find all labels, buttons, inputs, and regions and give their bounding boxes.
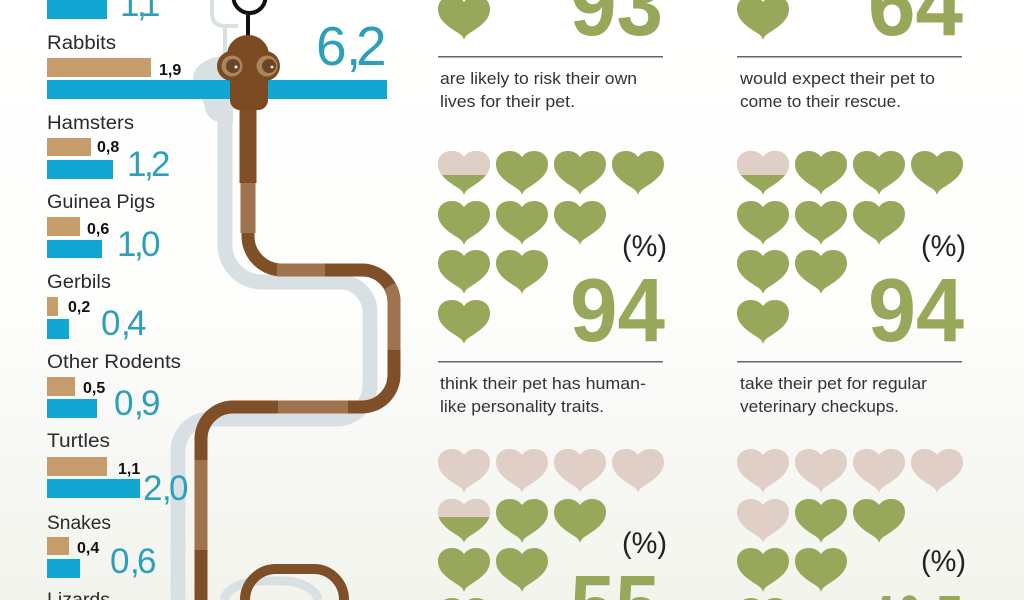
caption: come to their rescue.	[740, 92, 901, 111]
heart row	[737, 0, 789, 40]
panel: pet rescue stat	[737, 0, 963, 111]
bar row: guinea pigs: 0,6	[87, 221, 109, 238]
bar row: other rodents: 0,5	[83, 380, 105, 397]
caption: are likely to risk their own	[440, 69, 637, 88]
caption	[737, 361, 962, 416]
caption: lives for their pet.	[440, 92, 575, 111]
snake eye right	[256, 56, 278, 76]
caption: like personality traits.	[440, 397, 604, 416]
snake light segments	[201, 183, 394, 550]
bar row: rabbits: 1,9	[159, 62, 181, 79]
caption	[438, 56, 663, 111]
hearts grid	[438, 449, 664, 600]
bar row: guinea pigs: 1,0	[117, 225, 160, 264]
bar row: turtles: 2,0	[143, 469, 188, 508]
number 94: 94	[570, 261, 665, 361]
bar row: guinea pigs: Guinea Pigs	[47, 192, 155, 213]
bar row: gerbils: 0,4	[101, 304, 146, 343]
panel: third row left stat	[438, 449, 667, 600]
bar row: gerbils: 0,2	[68, 299, 90, 316]
bar row: other rodents	[47, 352, 181, 423]
bar row: other rodents: 0,9	[114, 384, 160, 423]
illustration: snake	[201, 0, 394, 600]
bar row: snakes: 0,6	[110, 542, 156, 581]
bar row: snakes: 0,4	[77, 540, 99, 557]
bar row: guinea pigs	[47, 192, 160, 264]
caption: think their pet has human-	[440, 374, 646, 393]
bar row: rabbits: Rabbits	[47, 33, 116, 54]
number 94: 94	[868, 261, 964, 361]
percent sign: (%)	[622, 230, 667, 263]
hearts grid	[737, 151, 963, 344]
percent sign: (%)	[921, 545, 966, 578]
bar row: turtles: Turtles	[47, 431, 110, 452]
hearts grid	[737, 449, 963, 600]
bar row: rabbits	[47, 15, 387, 99]
panel: personality stat	[438, 151, 667, 416]
caption: would expect their pet to	[739, 69, 935, 88]
snake shadow	[178, 0, 370, 600]
panel: veterinary stat	[737, 151, 966, 416]
bar row: gerbils	[47, 272, 146, 343]
bar row: hamsters: 1,2	[127, 145, 170, 184]
bar row: gerbils: Gerbils	[47, 272, 111, 293]
snake eye left	[222, 56, 242, 76]
bar row: other rodents: Other Rodents	[47, 352, 181, 373]
bar row: rabbits: 6,2	[316, 15, 387, 77]
bar row: hamsters	[47, 113, 170, 184]
panel: third row right stat	[737, 449, 966, 600]
snake body	[201, 100, 394, 600]
bar row: snakes: Snakes	[47, 513, 111, 534]
caption: veterinary checkups.	[740, 397, 899, 416]
panel: pets bar chart	[47, 0, 387, 600]
bar row: turtles: 1,1	[118, 461, 140, 478]
panel: risk lives stat	[438, 0, 663, 111]
snake head	[217, 35, 280, 110]
caption: take their pet for regular	[740, 374, 927, 393]
bar row: hamsters: 0,8	[97, 139, 119, 156]
bar row: snakes	[47, 513, 156, 581]
caption	[438, 361, 663, 416]
hearts grid	[438, 151, 664, 344]
bar row: turtles	[47, 431, 188, 508]
bar row: top cut-off pet	[47, 0, 160, 24]
bar row: hamsters: Hamsters	[47, 113, 134, 134]
percent sign: (%)	[921, 230, 966, 263]
percent sign: (%)	[622, 527, 667, 560]
snake tongue antenna	[234, 0, 266, 36]
caption	[737, 56, 962, 111]
heart row	[438, 0, 490, 40]
